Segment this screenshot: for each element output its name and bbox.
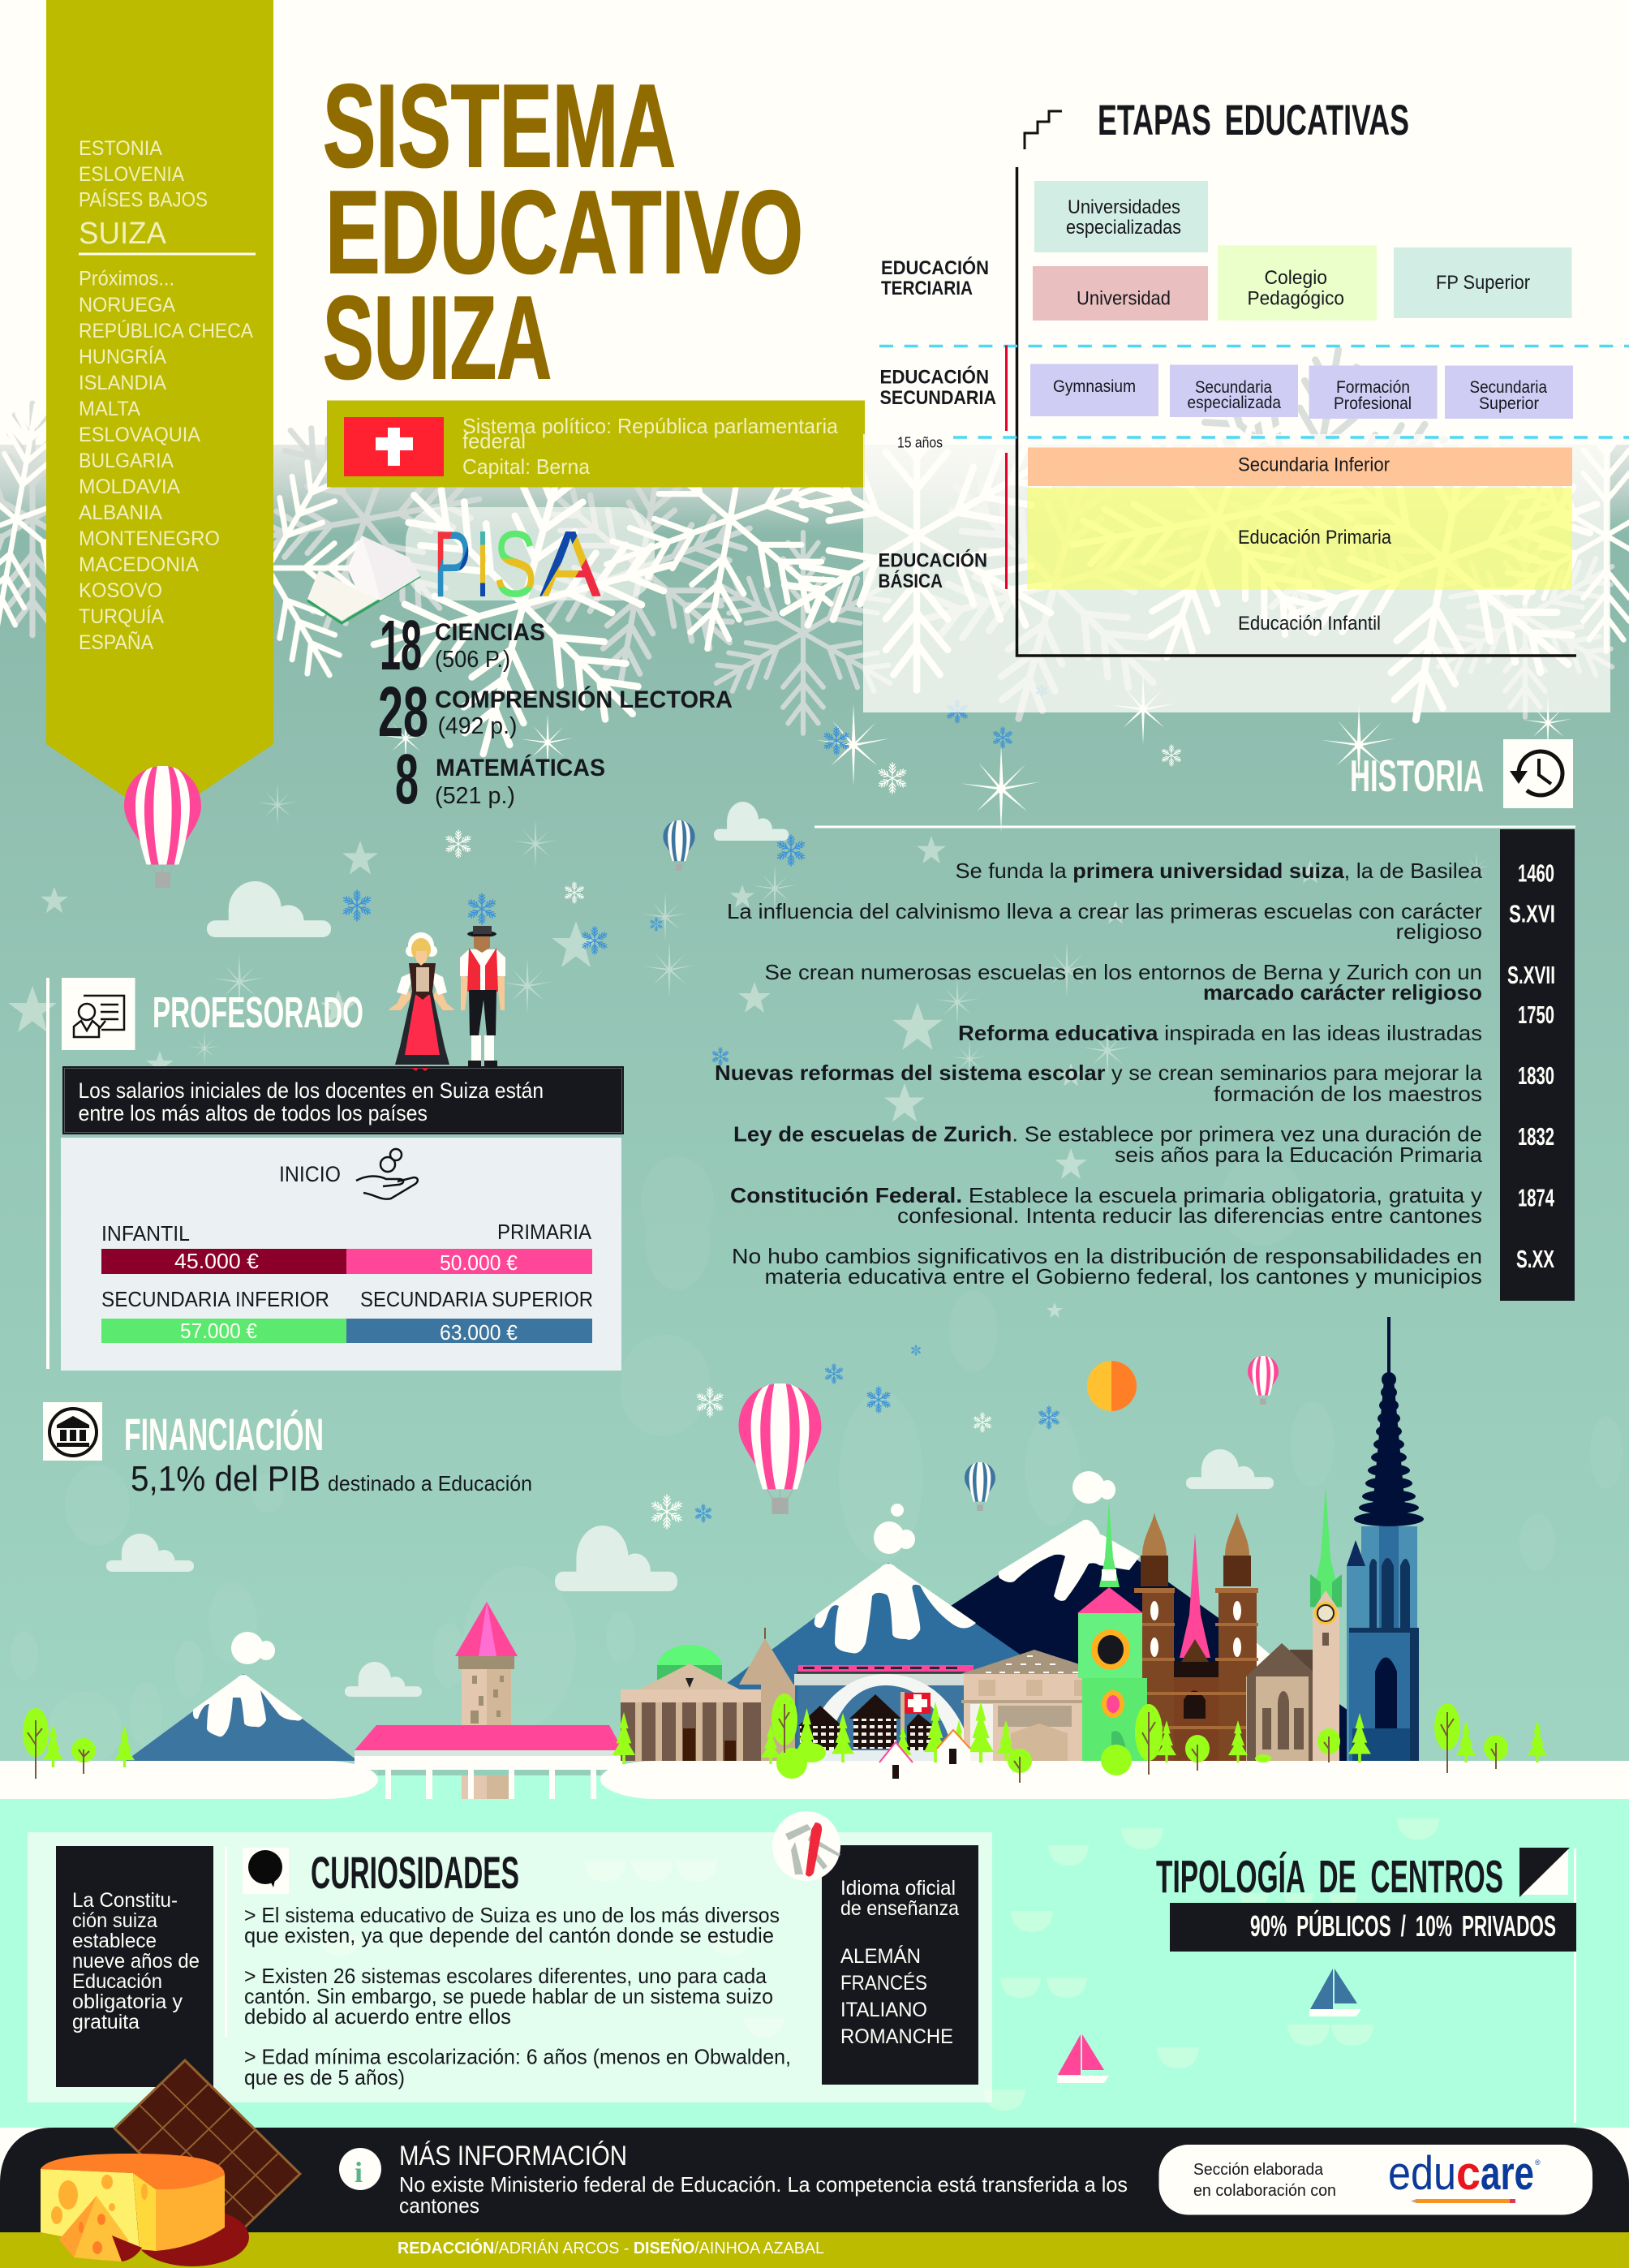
PISA result: lectura: (492 p.) [438, 713, 518, 739]
PISA logo: A [539, 511, 602, 617]
tertiary stage boxes [1033, 181, 1572, 321]
age label: 15 años [897, 435, 943, 451]
sun [1087, 1361, 1137, 1411]
callout: idiomas: ROMANCHE [840, 2025, 953, 2048]
timeline events: Nuevas reformas del sistema escolar y se crean seminarios para mejorar la [715, 1061, 1483, 1085]
facts text [462, 414, 839, 479]
building: museum [621, 1645, 761, 1761]
callout: idiomas: ALEMÁN [840, 1944, 921, 1968]
PISA result: lectura: COMPRENSIÓN LECTORA [435, 686, 733, 713]
country list: ESLOVAQUIA [79, 424, 200, 446]
building: brown church [1134, 1513, 1258, 1761]
balloon: small pink [1248, 1356, 1279, 1405]
country list: ALBANIA [79, 501, 162, 524]
salaries panel [61, 1138, 621, 1371]
food: cheese [41, 2154, 249, 2266]
callout: constitucion: establece [72, 1930, 157, 1952]
stage labels: EDUCACIÓN [878, 549, 987, 571]
building: small spire [739, 1628, 795, 1761]
country list: MACEDONIA [79, 553, 199, 576]
panel: country banner [46, 0, 273, 820]
country list: KOSOVO [79, 579, 162, 602]
stat: pib [131, 1459, 532, 1499]
basic stage bands: Secundaria Inferior [1238, 454, 1390, 476]
basic stage bands: Educación Primaria [1238, 527, 1392, 549]
sparkles [188, 674, 1572, 1079]
heading: etapas educativas: ETAPAS EDUCATIVAS [1098, 97, 1409, 144]
basic stage bands: Educación Infantil [1238, 613, 1381, 635]
curiosidades facts: debido al acuerdo entre ellos [244, 2004, 511, 2029]
PISA result: ciencias: 18 [380, 606, 422, 685]
partner text: Sección elaborada [1193, 2161, 1324, 2179]
educare logo: c [1456, 2147, 1481, 2200]
facts text: Sistema político: República parlamentaria [462, 414, 839, 438]
panel: curiosidades [28, 1811, 992, 2102]
timeline dates [1500, 829, 1575, 1301]
curiosidades facts: que es de 5 años) [244, 2065, 405, 2089]
timeline dates: 1750 [1518, 1001, 1554, 1029]
salary bars: 57.000 € [180, 1319, 257, 1343]
PISA result: matematicas: 8 [395, 740, 419, 819]
salary bars: 63.000 € [440, 1320, 518, 1345]
callout: salaries: entre los más altos de todos los países [78, 1101, 428, 1125]
secondary stage boxes: Gymnasium [1053, 377, 1136, 396]
callout: salaries [62, 1066, 624, 1134]
bridge with train [794, 1665, 974, 1761]
icon: clock history [1503, 739, 1573, 808]
background: cream top [0, 0, 1629, 487]
curiosidades facts: que existen, ya que depende del cantón donde se estudie [244, 1923, 774, 1947]
footer: credits: REDACCIÓN/ADRIÁN ARCOS - DISEÑO/AINHOA AZABAL [398, 2238, 824, 2257]
country list: ISLANDIA [79, 372, 166, 394]
salary labels: SECUNDARIA SUPERIOR [360, 1287, 593, 1311]
tertiary stage boxes: Colegio [1264, 267, 1327, 289]
salary bars: 45.000 € [174, 1249, 260, 1273]
building: half timbered houses [798, 1694, 964, 1761]
icon: swiss flag pole [900, 1692, 931, 1732]
lake [0, 1775, 1629, 2128]
callout: constitucion: La Constitu- [72, 1889, 178, 1912]
PISA result: ciencias: (506 P.) [435, 647, 510, 673]
country list: PAÍSES BAJOS [79, 188, 208, 211]
tertiary stage boxes: Pedagógico [1248, 287, 1344, 310]
icon: speech bubble [243, 1848, 289, 1894]
vertical rule [225, 1847, 227, 2037]
country list: TURQUÍA [79, 605, 164, 628]
curiosidades facts: > Edad mínima escolarización: 6 años (menos en Obwalden, [244, 2045, 791, 2069]
salary labels: PRIMARIA [497, 1220, 592, 1244]
timeline events: No hubo cambios significativos en la distribución de responsabilidades en [732, 1244, 1482, 1268]
country list: MONTENEGRO [79, 527, 220, 550]
balloon: big pink [739, 1384, 821, 1514]
timeline dates: 1874 [1518, 1183, 1554, 1212]
country list: NORUEGA [79, 294, 175, 316]
educare logo [1388, 2147, 1541, 2203]
timeline events: Ley de escuelas de Zurich . Se establece por primera vez una duración de [733, 1121, 1482, 1146]
timeline events: Se funda la primera universidad suiza , la de Basilea [956, 859, 1483, 883]
footer: more information: MÁS INFORMACIÓN [399, 2141, 627, 2171]
secondary stage boxes: especializada [1188, 394, 1281, 412]
country list: Próximos... [79, 268, 174, 290]
figure: woman [389, 932, 454, 1071]
building: navy cathedral [1347, 1317, 1424, 1761]
boat: pink [1057, 2034, 1109, 2083]
red brackets [1005, 346, 1008, 589]
lake ripples [320, 1818, 1439, 2111]
mountain: left [126, 1632, 358, 1761]
chalet: orange [937, 1730, 970, 1764]
tertiary stage boxes: especializadas [1066, 217, 1181, 239]
footer: olive band [0, 2232, 1629, 2268]
mountain: blue [622, 1504, 1173, 1761]
stat: pib: 5,1% del PIB [131, 1459, 320, 1499]
salary labels: INFANTIL [101, 1221, 190, 1246]
axis [1017, 167, 1576, 656]
bokeh circles [11, 1156, 1623, 1765]
callout: constitucion [56, 1846, 213, 2087]
stars [8, 836, 1322, 1318]
PISA result: matematicas: MATEMÁTICAS [436, 754, 605, 781]
footer: more information [399, 2141, 1128, 2218]
callout: constitucion: Educación [72, 1970, 162, 1993]
callout: salaries: Los salarios iniciales de los docentes en Suiza están [78, 1078, 544, 1103]
timeline events: Reforma educativa inspirada en las ideas ilustradas [958, 1021, 1482, 1045]
educare logo: ® [1535, 2158, 1541, 2167]
mountain: navy [711, 1471, 1419, 1761]
callout: constitucion: obligatoria y [72, 1990, 183, 2013]
PISA logo: P [433, 511, 471, 617]
tertiary stage boxes: Universidades [1068, 196, 1180, 218]
ground: right snow [600, 1761, 1629, 1799]
basic stage bands [1027, 448, 1572, 635]
timeline dates: S.XVI [1509, 899, 1555, 928]
PISA result: matematicas [395, 740, 605, 819]
country list: ESPAÑA [79, 630, 153, 654]
callout: idiomas: FRANCÉS [840, 1971, 927, 1995]
curiosidades facts: > El sistema educativo de Suiza es uno de los más diversos [244, 1903, 780, 1927]
footer: more information: No existe Ministerio federal de Educación. La competencia está transferida a los [399, 2172, 1128, 2197]
clouds [106, 802, 1274, 1697]
balloon: small blue [965, 1462, 995, 1511]
panel: PISA [307, 507, 733, 819]
country list: MOLDAVIA [79, 476, 180, 498]
stage labels: SECUNDARIA [879, 387, 996, 409]
panel: country facts [327, 401, 865, 487]
heading: financiacion: FINANCIACIÓN [124, 1409, 324, 1460]
trees [23, 1693, 1547, 1783]
secondary stage boxes: Secundaria [1195, 378, 1272, 397]
educare logo: edu [1388, 2147, 1456, 2200]
building: green clock tower [1077, 1500, 1147, 1761]
secondary stage boxes: Formación [1336, 378, 1410, 397]
panel: profesorado [46, 978, 624, 1371]
timeline dates: S.XX [1516, 1245, 1554, 1273]
background: teal sky [0, 445, 1629, 1781]
callout: constitucion: gratuita [72, 2011, 140, 2033]
title: EDUCATIVO [325, 166, 803, 298]
timeline events: confesional. Intenta reducir las diferencias entre cantones [897, 1203, 1482, 1228]
stat: pib: destinado a Educación [328, 1471, 532, 1496]
stat: public private [1170, 1903, 1576, 1952]
inicio label: INICIO [279, 1162, 341, 1186]
timeline dates: 1832 [1518, 1122, 1554, 1151]
callout: idiomas: Idioma oficial [840, 1877, 956, 1900]
icon: info: i [355, 2156, 363, 2188]
blue snowflakes [342, 684, 1060, 1522]
snowflake band [0, 326, 1629, 793]
timeline events: Se crean numerosas escuelas en los entornos de Berna y Zurich con un [764, 960, 1482, 984]
country list [79, 137, 256, 654]
callout: idiomas: ITALIANO [840, 1999, 927, 2021]
PISA result: lectura [378, 673, 733, 751]
secondary stage boxes: Secundaria [1470, 378, 1547, 397]
footer: dark band [0, 2128, 1629, 2268]
secondary stage boxes [1030, 364, 1573, 419]
figures: swiss couple [389, 926, 505, 1071]
PISA result: matematicas: (521 p.) [435, 783, 515, 809]
callout: constitucion: nueve años de [72, 1950, 200, 1973]
balloon: blue top [663, 820, 695, 871]
country list: REPÚBLICA CHECA [79, 319, 253, 342]
title: SUIZA [323, 272, 552, 403]
country list: SUIZA [79, 217, 167, 251]
footer: partner pill [1158, 2145, 1592, 2215]
timeline events: Constitución Federal. Establece la escuela primaria obligatoria, gratuita y [730, 1183, 1482, 1207]
callout: idiomas [822, 1845, 978, 2085]
PISA result: lectura: 28 [378, 673, 428, 751]
footer: more information: cantones [399, 2193, 479, 2218]
title: SISTEMA [323, 60, 676, 192]
timeline events: religioso [1395, 919, 1482, 944]
stage labels: EDUCACIÓN [881, 256, 989, 279]
heading: historia: HISTORIA [1350, 751, 1484, 801]
timeline dates: 1830 [1518, 1061, 1554, 1090]
callout: constitucion: ción suiza [72, 1909, 157, 1932]
heading: curiosidades: CURIOSIDADES [311, 1847, 519, 1898]
timeline events: La influencia del calvinismo lleva a crear las primeras escuelas con carácter [727, 899, 1482, 923]
salary labels: SECUNDARIA INFERIOR [101, 1287, 329, 1311]
stage labels: EDUCACIÓN [879, 365, 989, 388]
facts text: Capital: Berna [462, 454, 591, 479]
icon: stairs [1025, 111, 1062, 149]
timeline events: formación de los maestros [1214, 1082, 1482, 1106]
country list: HUNGRÍA [79, 345, 166, 368]
tower and bridge [355, 1602, 623, 1799]
timeline events: marcado carácter religioso [1203, 980, 1482, 1005]
panel: etapas educativas [863, 97, 1629, 712]
building: beige [961, 1650, 1110, 1761]
PISA logo: I [475, 511, 490, 617]
salary bars [101, 1249, 592, 1345]
PISA logo: S [493, 511, 537, 617]
icon: info [339, 2148, 381, 2190]
chalet: pink [879, 1742, 913, 1779]
icon: swiss knife [772, 1811, 840, 1881]
balloon: banner pink [124, 766, 201, 888]
icon: hand with coins [356, 1149, 418, 1199]
timeline events [715, 859, 1483, 1289]
curiosidades facts: > Existen 26 sistemas escolares diferentes, uno para cada [244, 1964, 767, 1988]
tertiary stage boxes: FP Superior [1436, 272, 1530, 294]
timeline events: seis años para la Educación Primaria [1115, 1143, 1483, 1167]
secondary stage boxes: Profesional [1334, 394, 1412, 413]
salary bars: 50.000 € [440, 1250, 518, 1275]
heading: profesorado: PROFESORADO [153, 988, 363, 1037]
stage labels: BÁSICA [878, 570, 943, 592]
boat: blue [1309, 1969, 1361, 2016]
country list: MALTA [79, 398, 140, 420]
timeline dates: S.XVII [1507, 961, 1555, 989]
panel: tipologia de centros [1156, 1848, 1576, 2123]
timeline dates: 1460 [1518, 859, 1554, 888]
curiosidades facts [244, 1903, 791, 2089]
curiosidades facts: cantón. Sin embargo, se puede hablar de un sistema suizo [244, 1984, 773, 2008]
PISA logo [433, 511, 602, 617]
figure: man [460, 926, 505, 1067]
partner text: en colaboración con [1193, 2182, 1336, 2200]
dashed age lines [879, 346, 1629, 437]
icon: bank [43, 1402, 102, 1461]
country list: BULGARIA [79, 450, 174, 472]
icon: swiss flag [344, 417, 444, 476]
food: chocolate bar [113, 2059, 302, 2244]
country list: ESLOVENIA [79, 163, 184, 186]
building: stone church [1246, 1643, 1318, 1761]
building: clock spire [1310, 1485, 1342, 1761]
stage labels: TERCIARIA [881, 278, 973, 299]
PISA result: ciencias: CIENCIAS [435, 619, 545, 646]
country list: ESTONIA [79, 137, 162, 160]
title [323, 60, 803, 403]
icon: open book [307, 536, 420, 623]
panel: financiacion [43, 1402, 532, 1499]
tertiary stage boxes: Universidad [1077, 287, 1171, 310]
stage labels [878, 256, 996, 592]
icon: split square [1519, 1848, 1570, 1897]
background: pale fade above sky [0, 445, 1629, 534]
partner text [1193, 2161, 1336, 2200]
panel: historia [715, 739, 1575, 1301]
callout: idiomas: de enseñanza [840, 1897, 959, 1920]
PISA result: ciencias [380, 606, 545, 685]
educare logo: are [1481, 2147, 1534, 2200]
ground: left snow [0, 1761, 378, 1799]
secondary stage boxes: Superior [1479, 394, 1539, 413]
facts text: federal [462, 428, 526, 453]
salary labels [101, 1220, 593, 1311]
icon: teacher [62, 978, 135, 1050]
timeline events: materia educativa entre el Gobierno federal, los cantones y municipios [764, 1264, 1482, 1289]
